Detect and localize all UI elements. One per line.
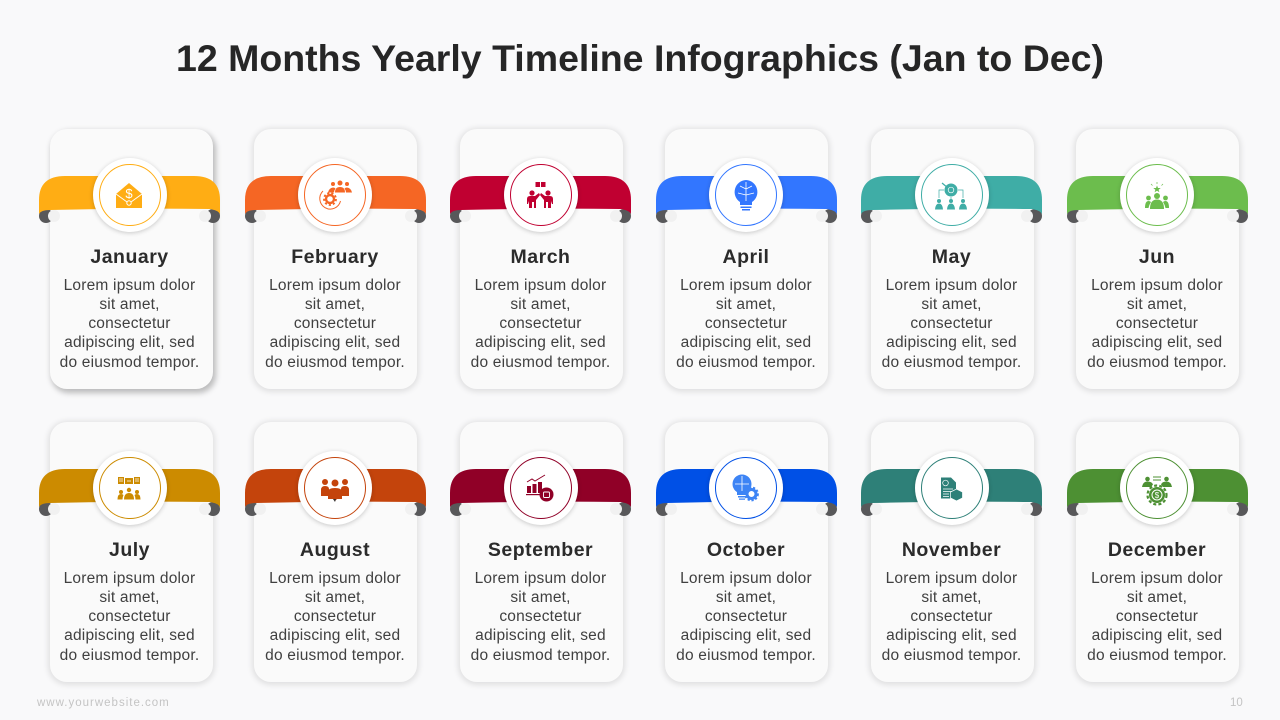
title: 12 Months Yearly Timeline Infographics (Jan to Dec) [176, 37, 1104, 79]
heading: September [488, 539, 593, 561]
icon: growth chart and shopping bag [526, 474, 554, 502]
icon: target and team [935, 182, 967, 210]
panel: July [39, 420, 220, 686]
body text: do eiusmod tempor. [676, 354, 816, 370]
icon: business team [321, 479, 349, 502]
body text: Lorem ipsum dolor [269, 276, 401, 294]
body text: consectetur [1116, 315, 1198, 332]
body text: adipiscing elit, sed [270, 627, 400, 644]
page number: 10 [1230, 697, 1243, 709]
body text: consectetur [705, 315, 787, 332]
ribbon [1066, 469, 1248, 517]
body text: adipiscing elit, sed [475, 334, 606, 351]
ribbon [1067, 176, 1248, 223]
body text: sit amet, [305, 296, 365, 313]
heading: December [1108, 539, 1206, 561]
heading: February [291, 246, 379, 268]
ribbon [861, 176, 1042, 223]
icon: team with star [1145, 182, 1169, 209]
badge circle [504, 158, 578, 232]
heading: November [902, 539, 1001, 561]
icon: envelope with dollar [116, 183, 142, 208]
icon: envelope with dollar: $ [125, 186, 133, 200]
body text: adipiscing elit, sed [64, 334, 195, 351]
icon: puzzle bulb and gear [732, 474, 759, 502]
body text: sit amet, [1127, 296, 1187, 313]
ribbon [450, 469, 631, 516]
body text: consectetur [910, 608, 993, 625]
body text: sit amet, [99, 296, 160, 313]
badge circle [914, 450, 988, 524]
ribbon [245, 176, 426, 223]
badge circle [504, 450, 578, 524]
ribbon [450, 176, 631, 223]
heading: April [723, 246, 769, 268]
badge circle [298, 450, 372, 524]
badge circle [92, 158, 166, 232]
panel: September [450, 420, 631, 686]
card background [870, 422, 1034, 682]
ribbon [39, 469, 220, 516]
body text: Lorem ipsum dolor [475, 276, 606, 294]
icon: team and gear [319, 180, 352, 210]
card background [870, 129, 1034, 389]
ribbon [656, 176, 837, 223]
body text: adipiscing elit, sed [681, 627, 811, 644]
body text [265, 276, 405, 370]
card background [460, 129, 622, 389]
icon: boards and team [118, 477, 140, 500]
card background [50, 422, 212, 682]
heading: October [707, 539, 785, 561]
panel: May [861, 127, 1042, 393]
body text [60, 276, 199, 370]
body text: Lorem ipsum dolor [64, 570, 195, 586]
body text: Lorem ipsum dolor [680, 570, 812, 586]
body text: sit amet, [99, 589, 160, 606]
icon: people exchange and dollar gear [1116, 448, 1196, 528]
body text: do eiusmod tempor. [882, 354, 1021, 370]
heading: Jun [1139, 246, 1175, 268]
card background [254, 422, 417, 682]
ribbon [245, 469, 426, 516]
body text [471, 570, 610, 664]
body text: do eiusmod tempor. [265, 646, 405, 664]
card background [1076, 129, 1239, 389]
body text: Lorem ipsum dolor [886, 276, 1017, 294]
body text [676, 570, 816, 664]
body text: Lorem ipsum dolor [680, 276, 812, 294]
body text: sit amet, [921, 296, 982, 313]
ribbon [861, 469, 1043, 517]
body text [60, 570, 199, 664]
body text: adipiscing elit, sed [681, 334, 811, 351]
heading: January [90, 246, 169, 268]
card background [50, 129, 212, 389]
body text [265, 570, 405, 664]
panel: November [861, 422, 1043, 684]
panel: June [1067, 127, 1248, 393]
body text: adipiscing elit, sed [886, 627, 1017, 644]
body text: Lorem ipsum dolor [269, 570, 401, 586]
body text: adipiscing elit, sed [270, 334, 400, 351]
body text: adipiscing elit, sed [886, 334, 1017, 351]
heading: March [511, 246, 570, 268]
ribbon [39, 176, 220, 223]
body text [861, 568, 1042, 665]
panel: August [245, 420, 426, 686]
body text: consectetur [88, 315, 171, 332]
body text: consectetur [499, 608, 582, 625]
body text: consectetur [294, 608, 376, 625]
body text: consectetur [705, 608, 787, 625]
body text: Lorem ipsum dolor [64, 276, 195, 294]
card background [460, 422, 622, 682]
body text: Lorem ipsum dolor [475, 570, 606, 586]
body text: sit amet, [716, 589, 776, 606]
badge circle [1120, 158, 1194, 232]
body text: sit amet, [716, 296, 776, 313]
icon: people exchange and dollar gear: $ [1154, 490, 1159, 500]
body text: do eiusmod tempor. [676, 646, 816, 664]
badge circle [709, 450, 783, 524]
body text: do eiusmod tempor. [471, 646, 610, 664]
body text: sit amet, [1127, 589, 1187, 606]
body text: sit amet, [510, 296, 571, 313]
panel: December [1066, 422, 1248, 684]
icon: two people talking [527, 182, 553, 208]
heading: May [932, 246, 971, 268]
badge circle [298, 158, 372, 232]
body text: consectetur [1116, 608, 1198, 625]
body text: sit amet, [510, 589, 571, 606]
body text: Lorem ipsum dolor [886, 570, 1017, 586]
heading: August [300, 539, 370, 561]
body text: Lorem ipsum dolor [1091, 570, 1223, 586]
body text: consectetur [910, 315, 993, 332]
body text: do eiusmod tempor. [1087, 354, 1227, 370]
body text: consectetur [294, 315, 376, 332]
body text: do eiusmod tempor. [265, 354, 405, 370]
badge circle [1120, 450, 1194, 524]
body text: do eiusmod tempor. [60, 354, 199, 370]
panel: October [656, 420, 837, 686]
body text: Lorem ipsum dolor [1091, 276, 1223, 294]
body text: sit amet, [305, 589, 365, 606]
body text: adipiscing elit, sed [64, 627, 195, 644]
footer website: www.yourwebsite.com [37, 697, 170, 709]
body text: do eiusmod tempor. [60, 646, 199, 664]
card background [665, 129, 828, 389]
body text [1087, 276, 1227, 370]
card background [665, 422, 828, 682]
panel: February [245, 127, 426, 393]
ribbon [656, 469, 837, 516]
body text: do eiusmod tempor. [1087, 646, 1227, 664]
card background [1076, 422, 1239, 682]
body text: sit amet, [921, 589, 982, 606]
body text: do eiusmod tempor. [471, 354, 610, 370]
body text: adipiscing elit, sed [475, 627, 606, 644]
body text: consectetur [499, 315, 582, 332]
body text [882, 276, 1021, 370]
badge circle [92, 450, 166, 524]
body text [471, 276, 610, 370]
heading: July [109, 539, 150, 561]
panel: January [39, 128, 220, 396]
body text: consectetur [88, 608, 171, 625]
icon: brain light bulb [734, 180, 758, 210]
body text: adipiscing elit, sed [1092, 627, 1222, 644]
body text [1066, 568, 1248, 665]
icon: document and parcel [911, 448, 991, 528]
panel: March [450, 127, 631, 393]
card background [254, 129, 417, 389]
badge circle [914, 158, 988, 232]
body text: adipiscing elit, sed [1092, 334, 1222, 351]
body text [676, 276, 816, 370]
badge circle [709, 158, 783, 232]
body text: do eiusmod tempor. [882, 646, 1021, 664]
panel: April [656, 127, 837, 393]
